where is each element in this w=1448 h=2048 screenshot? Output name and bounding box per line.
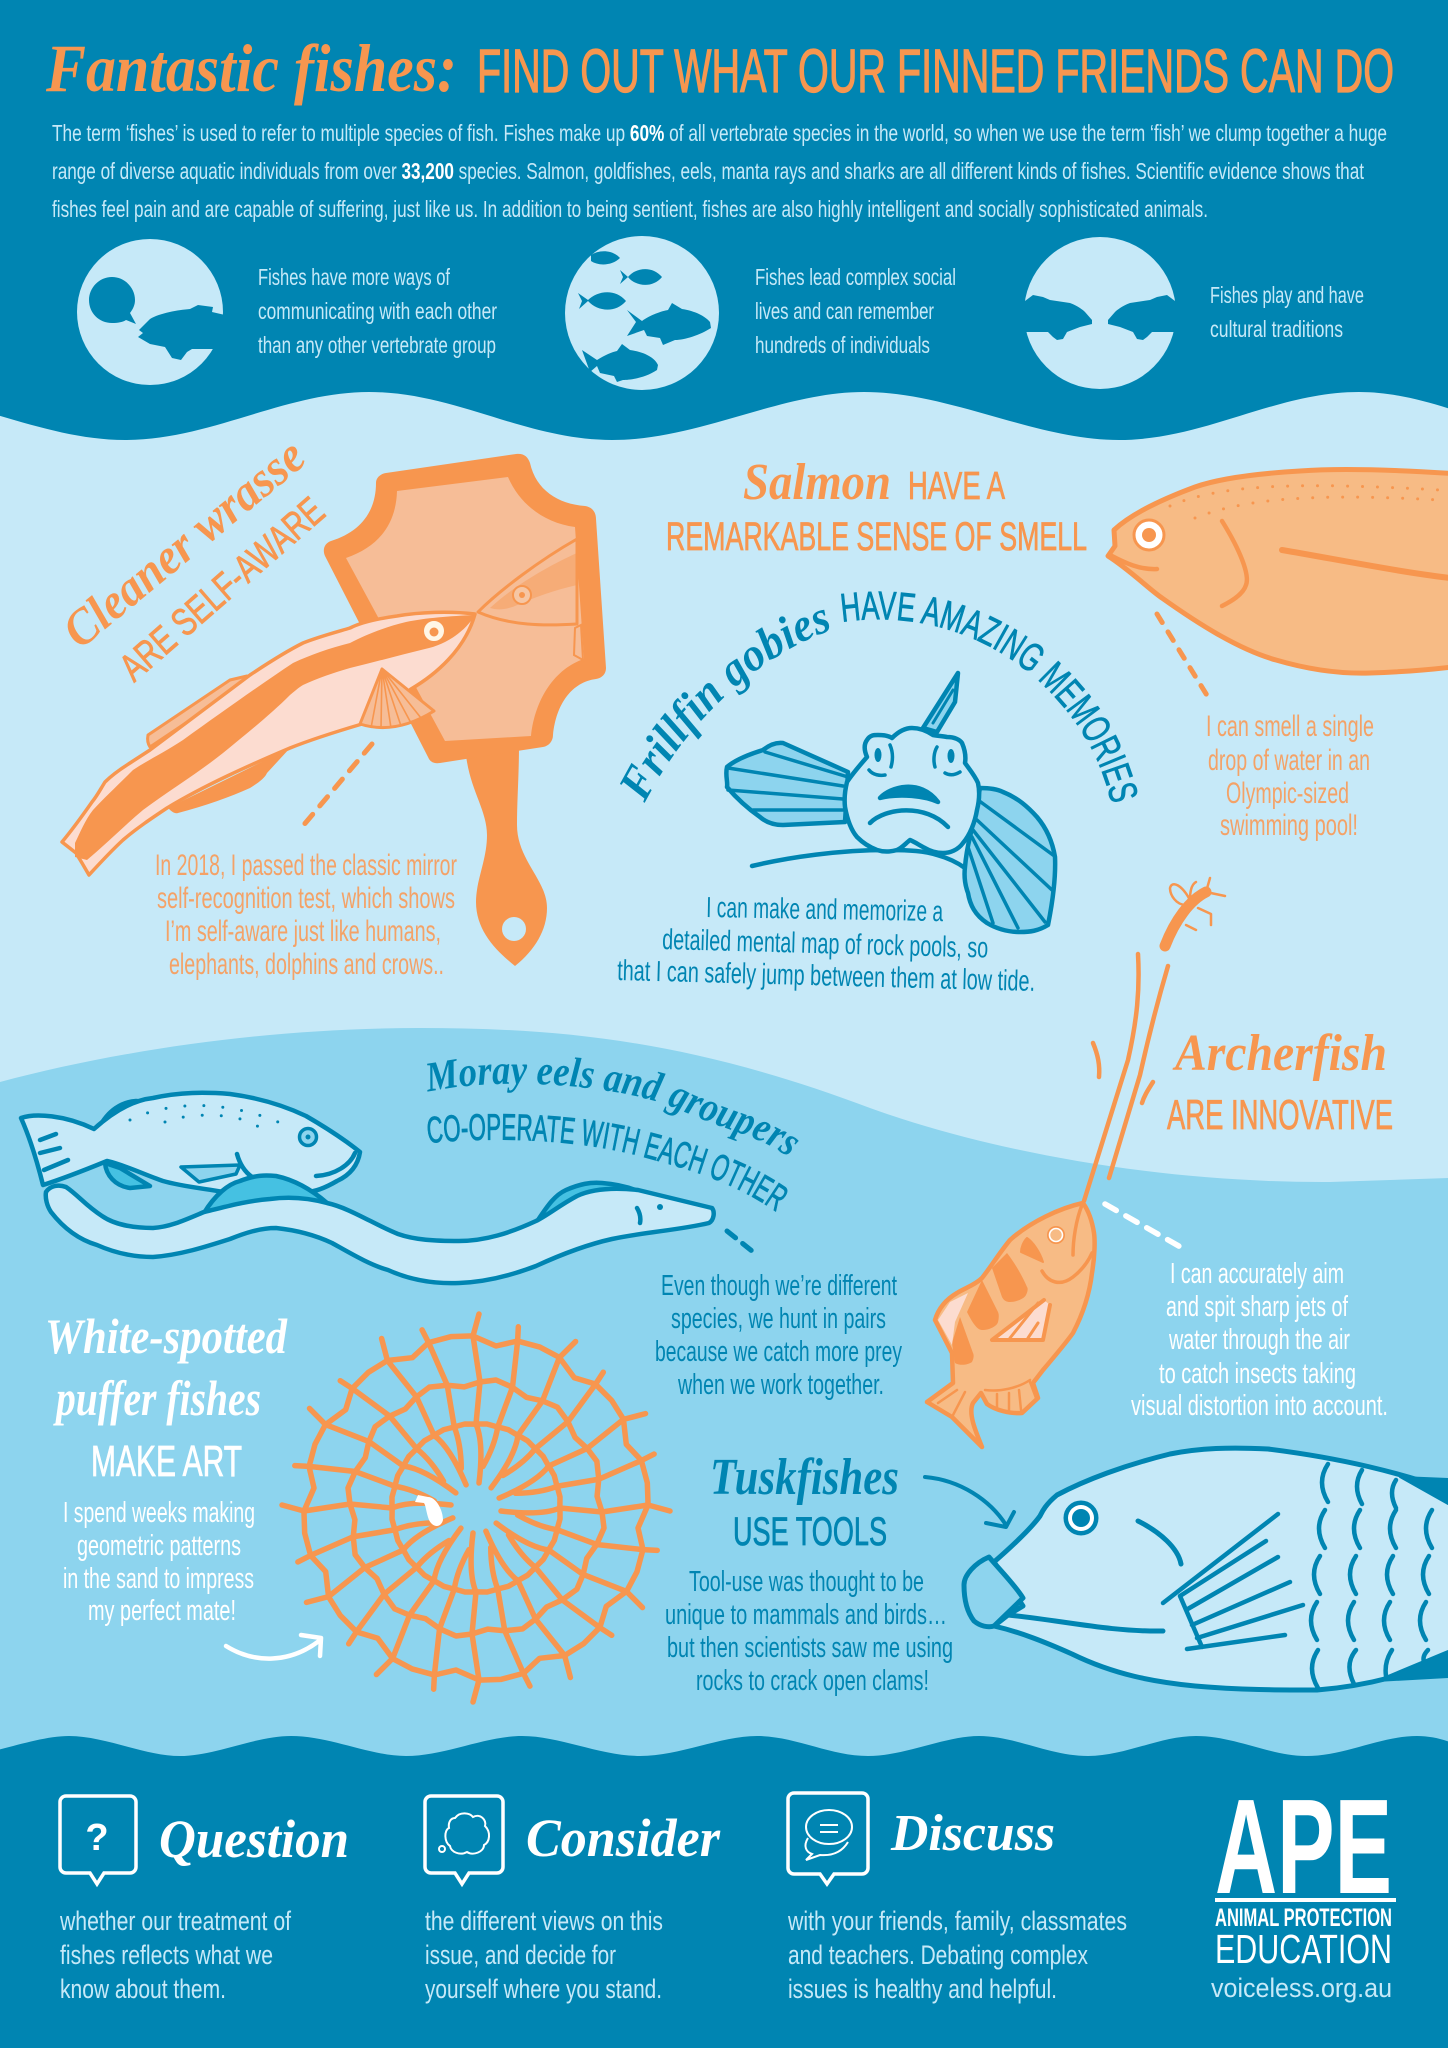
icon: question bubble: ? xyxy=(85,1817,109,1859)
text: and teachers. Debating complex xyxy=(788,1940,1088,1970)
heading: Moray eels and groupers xyxy=(427,1057,799,1154)
reflection of wrasse xyxy=(478,539,583,660)
text: Fishes lead complex social xyxy=(755,264,956,290)
heading xyxy=(427,1057,799,1212)
arrow xyxy=(925,1477,1014,1527)
panel: white-spotted puffer fishes xyxy=(45,1308,670,1702)
heading: ARE SELF-AWARE xyxy=(112,489,333,690)
text: I can accurately aim xyxy=(1170,1258,1344,1290)
text: whether our treatment of xyxy=(59,1906,291,1936)
text: In 2018, I passed the classic mirror xyxy=(155,849,457,882)
text xyxy=(755,264,956,358)
text: detailed mental map of rock pools, so xyxy=(662,924,989,965)
text: lives and can remember xyxy=(755,298,934,324)
icon: thought bubble xyxy=(425,1796,503,1884)
text xyxy=(1210,282,1364,342)
heading xyxy=(45,1308,288,1486)
intro text xyxy=(52,120,1387,222)
heading xyxy=(1167,1025,1393,1138)
dashed pointer xyxy=(1105,1204,1184,1249)
panel: moray eels and groupers xyxy=(18,1057,902,1401)
illustration: insect xyxy=(1165,878,1225,946)
text: because we catch more prey xyxy=(655,1336,902,1368)
text: unique to mammals and birds… xyxy=(665,1599,947,1631)
text: species, we hunt in pairs xyxy=(671,1303,886,1335)
heading: Salmon xyxy=(743,454,891,511)
icon: question bubble xyxy=(60,1796,136,1884)
text xyxy=(665,1566,953,1697)
text xyxy=(258,264,497,358)
illustration: tuskfish xyxy=(964,1448,1448,1690)
title xyxy=(45,30,1394,106)
heading: Discuss xyxy=(890,1805,1055,1862)
text xyxy=(425,1906,663,2004)
background: mid water xyxy=(0,1028,1448,2048)
text: with your friends, family, classmates xyxy=(787,1906,1127,1936)
text: and spit sharp jets of xyxy=(1166,1291,1349,1323)
panel: frillfin gobies xyxy=(617,591,1138,998)
illustration: goby xyxy=(726,673,1055,932)
arrow xyxy=(226,1635,321,1659)
heading xyxy=(710,1449,899,1554)
heading xyxy=(666,454,1087,559)
text: fishes reflects what we xyxy=(60,1940,273,1970)
text: Fishes have more ways of xyxy=(258,264,450,290)
panel: consider xyxy=(425,1796,721,2004)
text xyxy=(59,1906,291,2004)
text: the different views on this xyxy=(425,1906,663,1936)
text xyxy=(1206,710,1374,842)
illustration: salmon xyxy=(1108,470,1448,673)
dashed pointer xyxy=(727,1231,752,1251)
text: I can make and memorize a xyxy=(706,892,944,928)
text: Olympic-sized xyxy=(1226,777,1349,810)
panel: communicating xyxy=(77,239,497,385)
text: issue, and decide for xyxy=(425,1940,616,1970)
title: Fantastic fishes: xyxy=(45,30,457,106)
illustration: hand mirror xyxy=(324,454,606,966)
text: than any other vertebrate group xyxy=(258,332,496,358)
heading: REMARKABLE SENSE OF SMELL xyxy=(666,515,1087,559)
text: water through the air xyxy=(1168,1324,1350,1356)
heading: puffer fishes xyxy=(53,1370,261,1426)
text: I spend weeks making xyxy=(63,1497,255,1529)
panel: tuskfishes xyxy=(665,1448,1448,1697)
heading: White-spotted xyxy=(45,1308,288,1364)
heading: Question xyxy=(159,1809,349,1869)
text: my perfect mate! xyxy=(88,1595,236,1627)
text: Tool-use was thought to be xyxy=(689,1566,924,1598)
panel: discuss xyxy=(787,1793,1127,2004)
text: rocks to crack open clams! xyxy=(696,1665,929,1697)
text xyxy=(617,892,1036,998)
logo: APE: voiceless.org.au xyxy=(1211,1973,1392,2003)
text xyxy=(655,1270,902,1401)
heading: Archerfish xyxy=(1172,1025,1387,1082)
text xyxy=(787,1906,1127,2004)
text xyxy=(155,849,457,981)
logo: APE xyxy=(1211,1771,1396,2003)
text: communicating with each other xyxy=(258,298,497,324)
heading: Consider xyxy=(526,1808,721,1868)
text: I’m self-aware just like humans, xyxy=(165,915,441,948)
illustration: archerfish xyxy=(927,1203,1095,1447)
heading: Cleaner wrasse xyxy=(51,427,315,658)
text: when we work together. xyxy=(677,1369,884,1401)
heading: CO-OPERATE WITH EACH OTHER xyxy=(428,1114,788,1212)
illustration: grouper xyxy=(21,1093,360,1196)
heading: Frillfin gobies xyxy=(620,610,830,803)
scale dots xyxy=(1170,486,1440,518)
text: yourself where you stand. xyxy=(425,1974,662,2004)
text: hundreds of individuals xyxy=(755,332,930,358)
panel: cleaner wrasse xyxy=(51,427,606,981)
text: geometric patterns xyxy=(77,1530,241,1562)
text: know about them. xyxy=(60,1974,226,2004)
text: that I can safely jump between them at low tide. xyxy=(617,955,1036,998)
illustration: cleaner wrasse xyxy=(62,612,475,875)
text: elephants, dolphins and crows.. xyxy=(169,948,444,981)
text: issues is healthy and helpful. xyxy=(788,1974,1057,2004)
panel: question xyxy=(59,1796,349,2004)
icon: two fish facing xyxy=(1020,237,1180,389)
text: Even though we’re different xyxy=(661,1270,897,1302)
icon: tiny white puffer xyxy=(415,1495,443,1526)
heading: HAVE AMAZING MEMORIES xyxy=(841,591,1138,802)
logo: APE: EDUCATION xyxy=(1215,1926,1392,1972)
pectoral fin xyxy=(360,669,434,729)
text xyxy=(63,1497,255,1627)
heading xyxy=(620,591,1138,803)
text: in the sand to impress xyxy=(63,1563,254,1595)
background: footer wave xyxy=(0,1736,1448,2048)
text: self-recognition test, which shows xyxy=(157,882,455,915)
panel: archerfish xyxy=(927,878,1393,1447)
text: cultural traditions xyxy=(1210,316,1343,342)
icon: discussion bubbles xyxy=(788,1793,868,1884)
text: but then scientists saw me using xyxy=(667,1632,953,1664)
text: Fishes play and have xyxy=(1210,282,1364,308)
text: swimming pool! xyxy=(1220,809,1358,842)
heading: HAVE A xyxy=(908,465,1005,508)
heading: Tuskfishes xyxy=(710,1449,899,1506)
dashed pointer xyxy=(302,744,372,827)
jets of water xyxy=(1084,954,1168,1201)
text xyxy=(1131,1258,1388,1422)
dashed pointer xyxy=(1157,614,1208,697)
panel: social lives xyxy=(565,236,956,390)
heading: USE TOOLS xyxy=(733,1510,887,1554)
text: to catch insects taking xyxy=(1159,1358,1356,1390)
illustration: moray eel xyxy=(46,1176,714,1283)
illustration: sand circle xyxy=(282,1314,670,1702)
heading: MAKE ART xyxy=(91,1437,242,1486)
panel: play and culture xyxy=(1020,237,1364,389)
panel: salmon xyxy=(666,454,1448,842)
icon: school of fish xyxy=(565,236,719,390)
icon: fish with speech bubble xyxy=(77,239,225,385)
